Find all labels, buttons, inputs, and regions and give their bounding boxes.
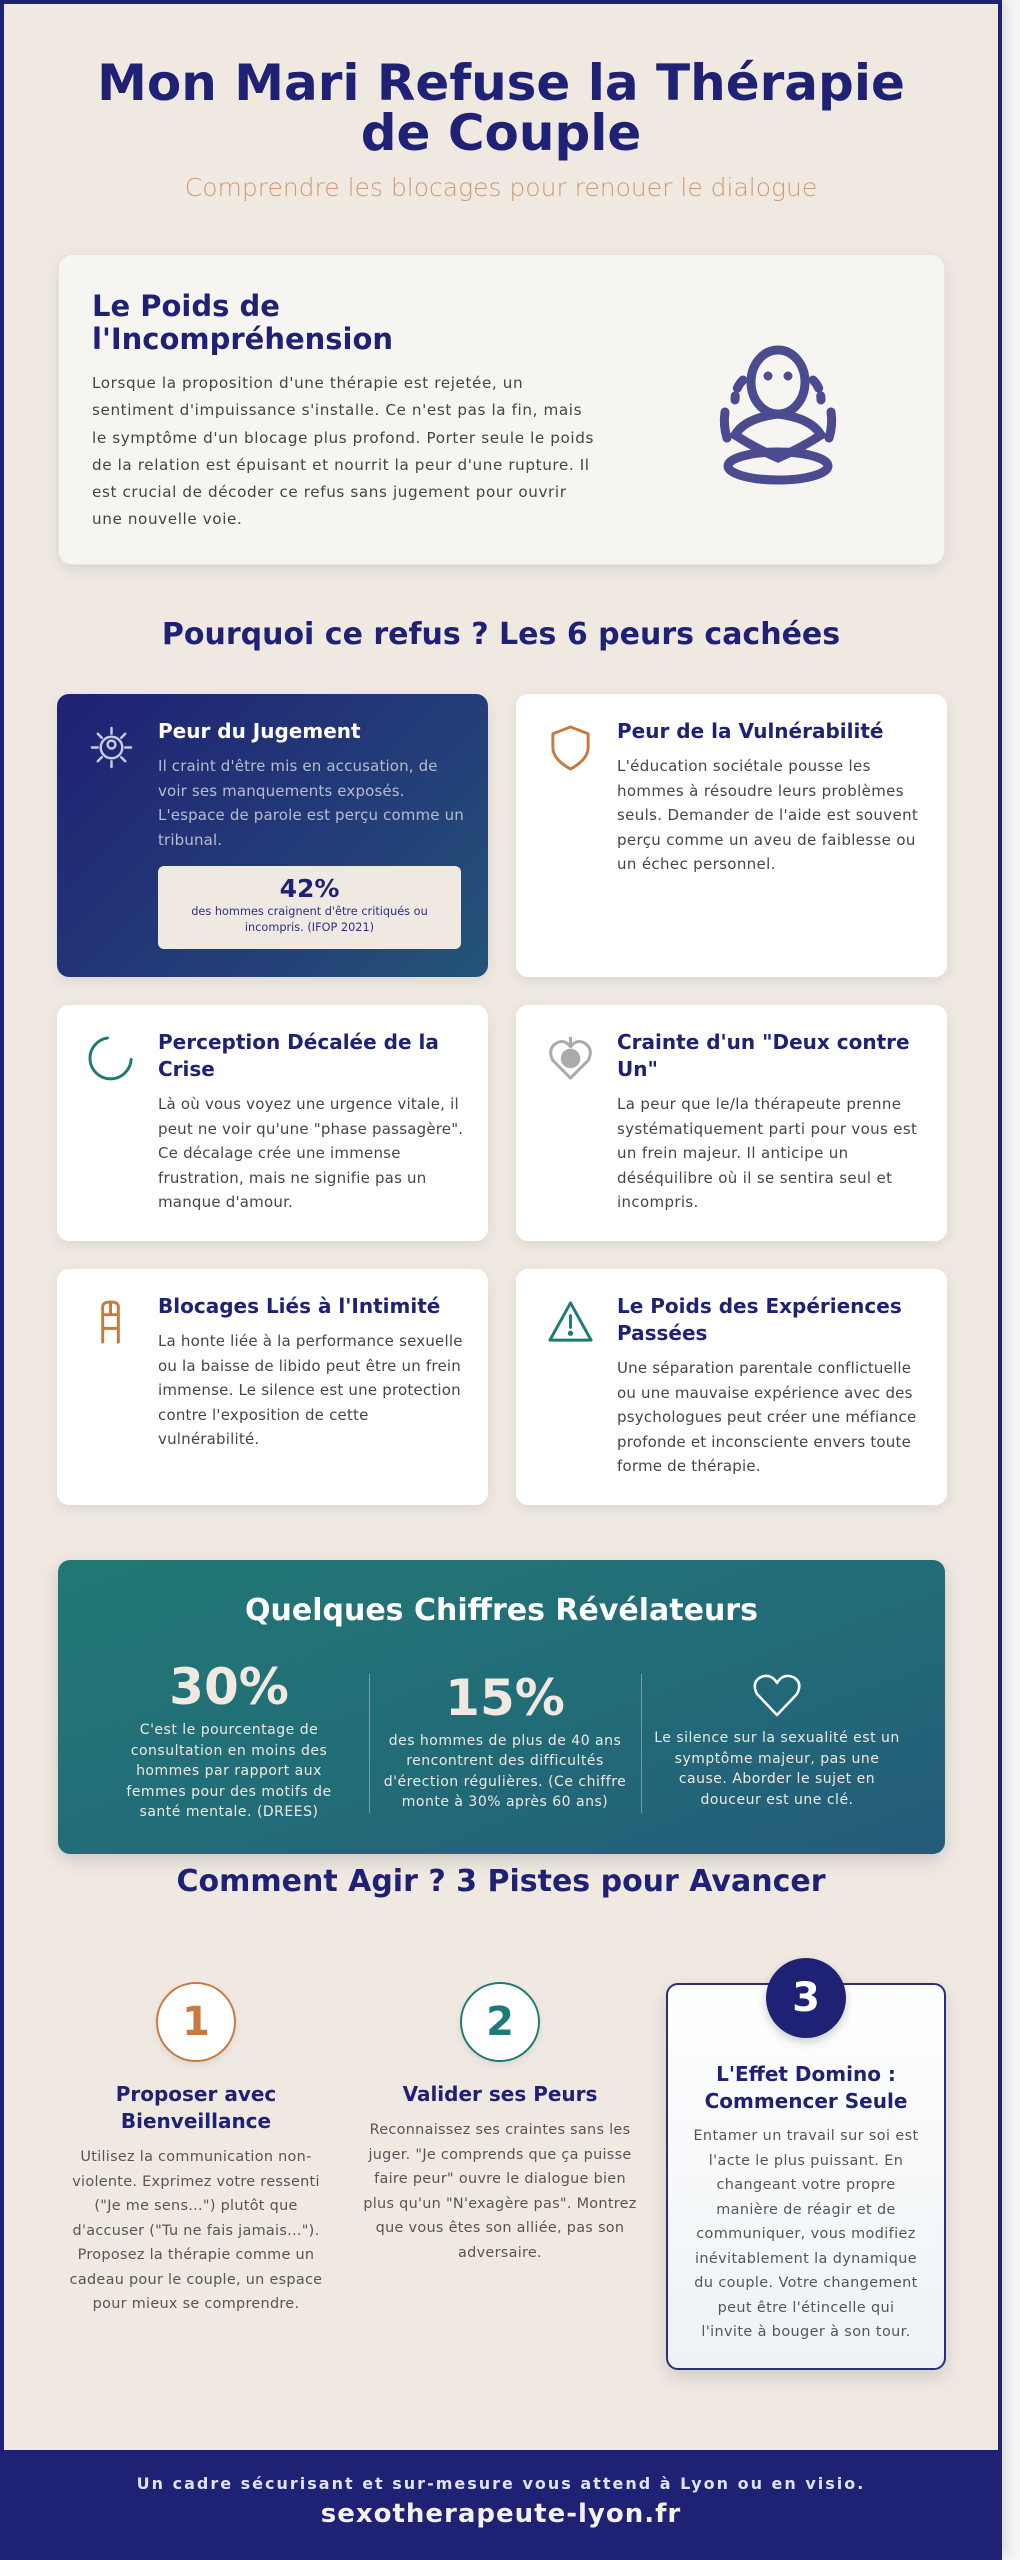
- step 2: Reconnaissez ses craintes sans les juger. "Je comprends que ça puisse faire peur" ouvre le dialogue bien plus qu'un "N'exagère pas". Montrez que vous êtes son alliée, pas son adversaire.: [363, 2122, 637, 2260]
- card: deux contre un: [516, 1005, 947, 1241]
- step 2: Valider ses Peurs: [403, 2082, 597, 2106]
- card: perception decalee: Là où vous voyez une urgence vitale, il peut ne voir qu'une "phase passagère". Ce décalage crée une immense frustration, mais ne signifie pas un manque d'amour.: [158, 1095, 463, 1211]
- card: vulnerabilite: [516, 694, 947, 977]
- stat box 42%: incompris. (IFOP 2021): [245, 921, 374, 934]
- card: deux contre un: Crainte d'un "Deux contre Un": [617, 1030, 910, 1081]
- stat: heart: Le silence sur la sexualité est un symptôme majeur, pas une cause. Aborder le sujet en douceur est une clé.: [654, 1730, 900, 1808]
- step 3 card: [666, 1983, 946, 2370]
- title: de Couple: [361, 104, 641, 162]
- intro text: Lorsque la proposition d'une thérapie est rejetée, un sentiment d'impuissance s'installe. Ce n'est pas la fin, mais le symptôme d'un blocage plus profond. Porter seule le poids de la relation est épuisant et nourrit la peur d'une rupture. Il est crucial de décoder ce refus sans jugement pour ouvrir une nouvelle voie.: [92, 374, 594, 528]
- step 1: [70, 1982, 322, 2312]
- circle 2: 2: [486, 1999, 514, 2045]
- circle 3: [766, 1958, 846, 2038]
- icon: ladder: [101, 1300, 120, 1344]
- step 1: Proposer avec: [116, 2082, 276, 2106]
- title: [97, 54, 905, 162]
- stat box 42%: des hommes craignent d'être critiqués ou: [191, 905, 428, 918]
- panel: intro: [58, 254, 945, 565]
- stat: 15%: des hommes de plus de 40 ans rencontrent des difficultés d'érection régulières. (Ce chiffre monte à 30% après 60 ans): [384, 1732, 626, 1810]
- step 3 card: Commencer Seule: [705, 2089, 907, 2113]
- step 1: Utilisez la communication non-violente. Exprimez votre ressenti ("Je me sens...") plutôt que d'accuser ("Tu ne fais jamais..."). Proposez la thérapie comme un cadeau pour le couple, un espace pour mieux se comprendre.: [70, 2149, 322, 2312]
- card: perception decalee: [57, 1005, 488, 1241]
- card: peur du jugement: Il craint d'être mis en accusation, de voir ses manquements exposés. L'espace de parole est perçu comme un tribunal.: [158, 757, 464, 848]
- card: deux contre un: La peur que le/la thérapeute prenne systématiquement parti pour vous est un frein majeur. Il anticipe un déséquilibre où il se sentira seul et incompris.: [617, 1095, 917, 1211]
- card: intimite: Blocages Liés à l'Intimité: [158, 1294, 440, 1318]
- stat: heart: [654, 1674, 900, 1808]
- card: peur du jugement: Peur du Jugement: [158, 719, 361, 743]
- intro heading: Le Poids de: [92, 289, 280, 323]
- footer: Un cadre sécurisant et sur-mesure vous attend à Lyon ou en visio.: [137, 2474, 865, 2493]
- icon: shield: [551, 726, 590, 770]
- stat box 42%: [158, 866, 461, 949]
- section heading: 6 fears: Pourquoi ce refus ? Les 6 peurs cachées: [162, 617, 840, 652]
- stat: 30%: [126, 1658, 332, 1820]
- stat: 15%: 15%: [445, 1668, 565, 1726]
- stat: 30%: C'est le pourcentage de consultation en moins des hommes par rapport aux femmes pour des motifs de santé mentale. (DREES): [126, 1722, 332, 1820]
- card: vulnerabilite: L'éducation sociétale pousse les hommes à résoudre leurs problèmes seuls. Demander de l'aide est souvent perçu comme un aveu de faiblesse ou un échec personnel.: [617, 757, 918, 873]
- icon: person figure: [720, 346, 836, 484]
- circle 3: 3: [792, 1975, 820, 2021]
- card: experiences passees: [516, 1269, 947, 1505]
- circle 1: 1: [182, 1999, 210, 2045]
- panel: stats: [58, 1560, 945, 1854]
- card: intimite: [57, 1269, 488, 1505]
- card: experiences passees: Le Poids des Expériences Passées: [617, 1294, 902, 1345]
- card: experiences passees: Une séparation parentale conflictuelle ou une mauvaise expérience avec des psychologues peut créer une méfiance profonde et inconsciente envers toute forme de thérapie.: [617, 1359, 916, 1475]
- stat: 30%: 30%: [169, 1658, 289, 1716]
- title: Mon Mari Refuse la Thérapie: [97, 54, 905, 112]
- footer: sexotherapeute-lyon.fr: [321, 2499, 681, 2529]
- intro heading: [92, 289, 393, 356]
- card: perception decalee: Perception Décalée de la Crise: [158, 1030, 439, 1081]
- subtitle: Comprendre les blocages pour renouer le dialogue: [185, 173, 817, 202]
- stat: 15%: [384, 1668, 626, 1810]
- step 2: [363, 1982, 637, 2260]
- footer: [0, 2450, 1002, 2560]
- card: peur du jugement: [57, 694, 488, 977]
- circle 1: [156, 1982, 236, 2062]
- step 3 card: L'Effet Domino :: [716, 2062, 896, 2086]
- step 1: Bienveillance: [121, 2109, 271, 2133]
- circle 2: [460, 1982, 540, 2062]
- card: intimite: La honte liée à la performance sexuelle ou la baisse de libido peut être un frein immense. Le silence est une protection contre l'exposition de cette vulnérabilité.: [158, 1332, 463, 1448]
- intro heading: l'Incompréhension: [92, 322, 393, 356]
- step 3 card: Entamer un travail sur soi est l'acte le plus puissant. En changeant votre propre manière de réagir et de communiquer, vous modifiez inévitablement la dynamique du couple. Votre changement peut être l'étincelle qui l'invite à bouger à son tour.: [693, 2128, 919, 2340]
- icon: warning triangle: [548, 1301, 593, 1342]
- section heading: actions: Comment Agir ? 3 Pistes pour Avancer: [176, 1864, 826, 1899]
- card: vulnerabilite: Peur de la Vulnérabilité: [617, 719, 883, 743]
- icon: sun eye: [90, 726, 132, 768]
- stats heading: Quelques Chiffres Révélateurs: [245, 1593, 758, 1628]
- stat box 42%: 42%: [280, 874, 339, 903]
- icon: arc: [88, 1036, 133, 1080]
- icon: heart gray: [549, 1037, 592, 1080]
